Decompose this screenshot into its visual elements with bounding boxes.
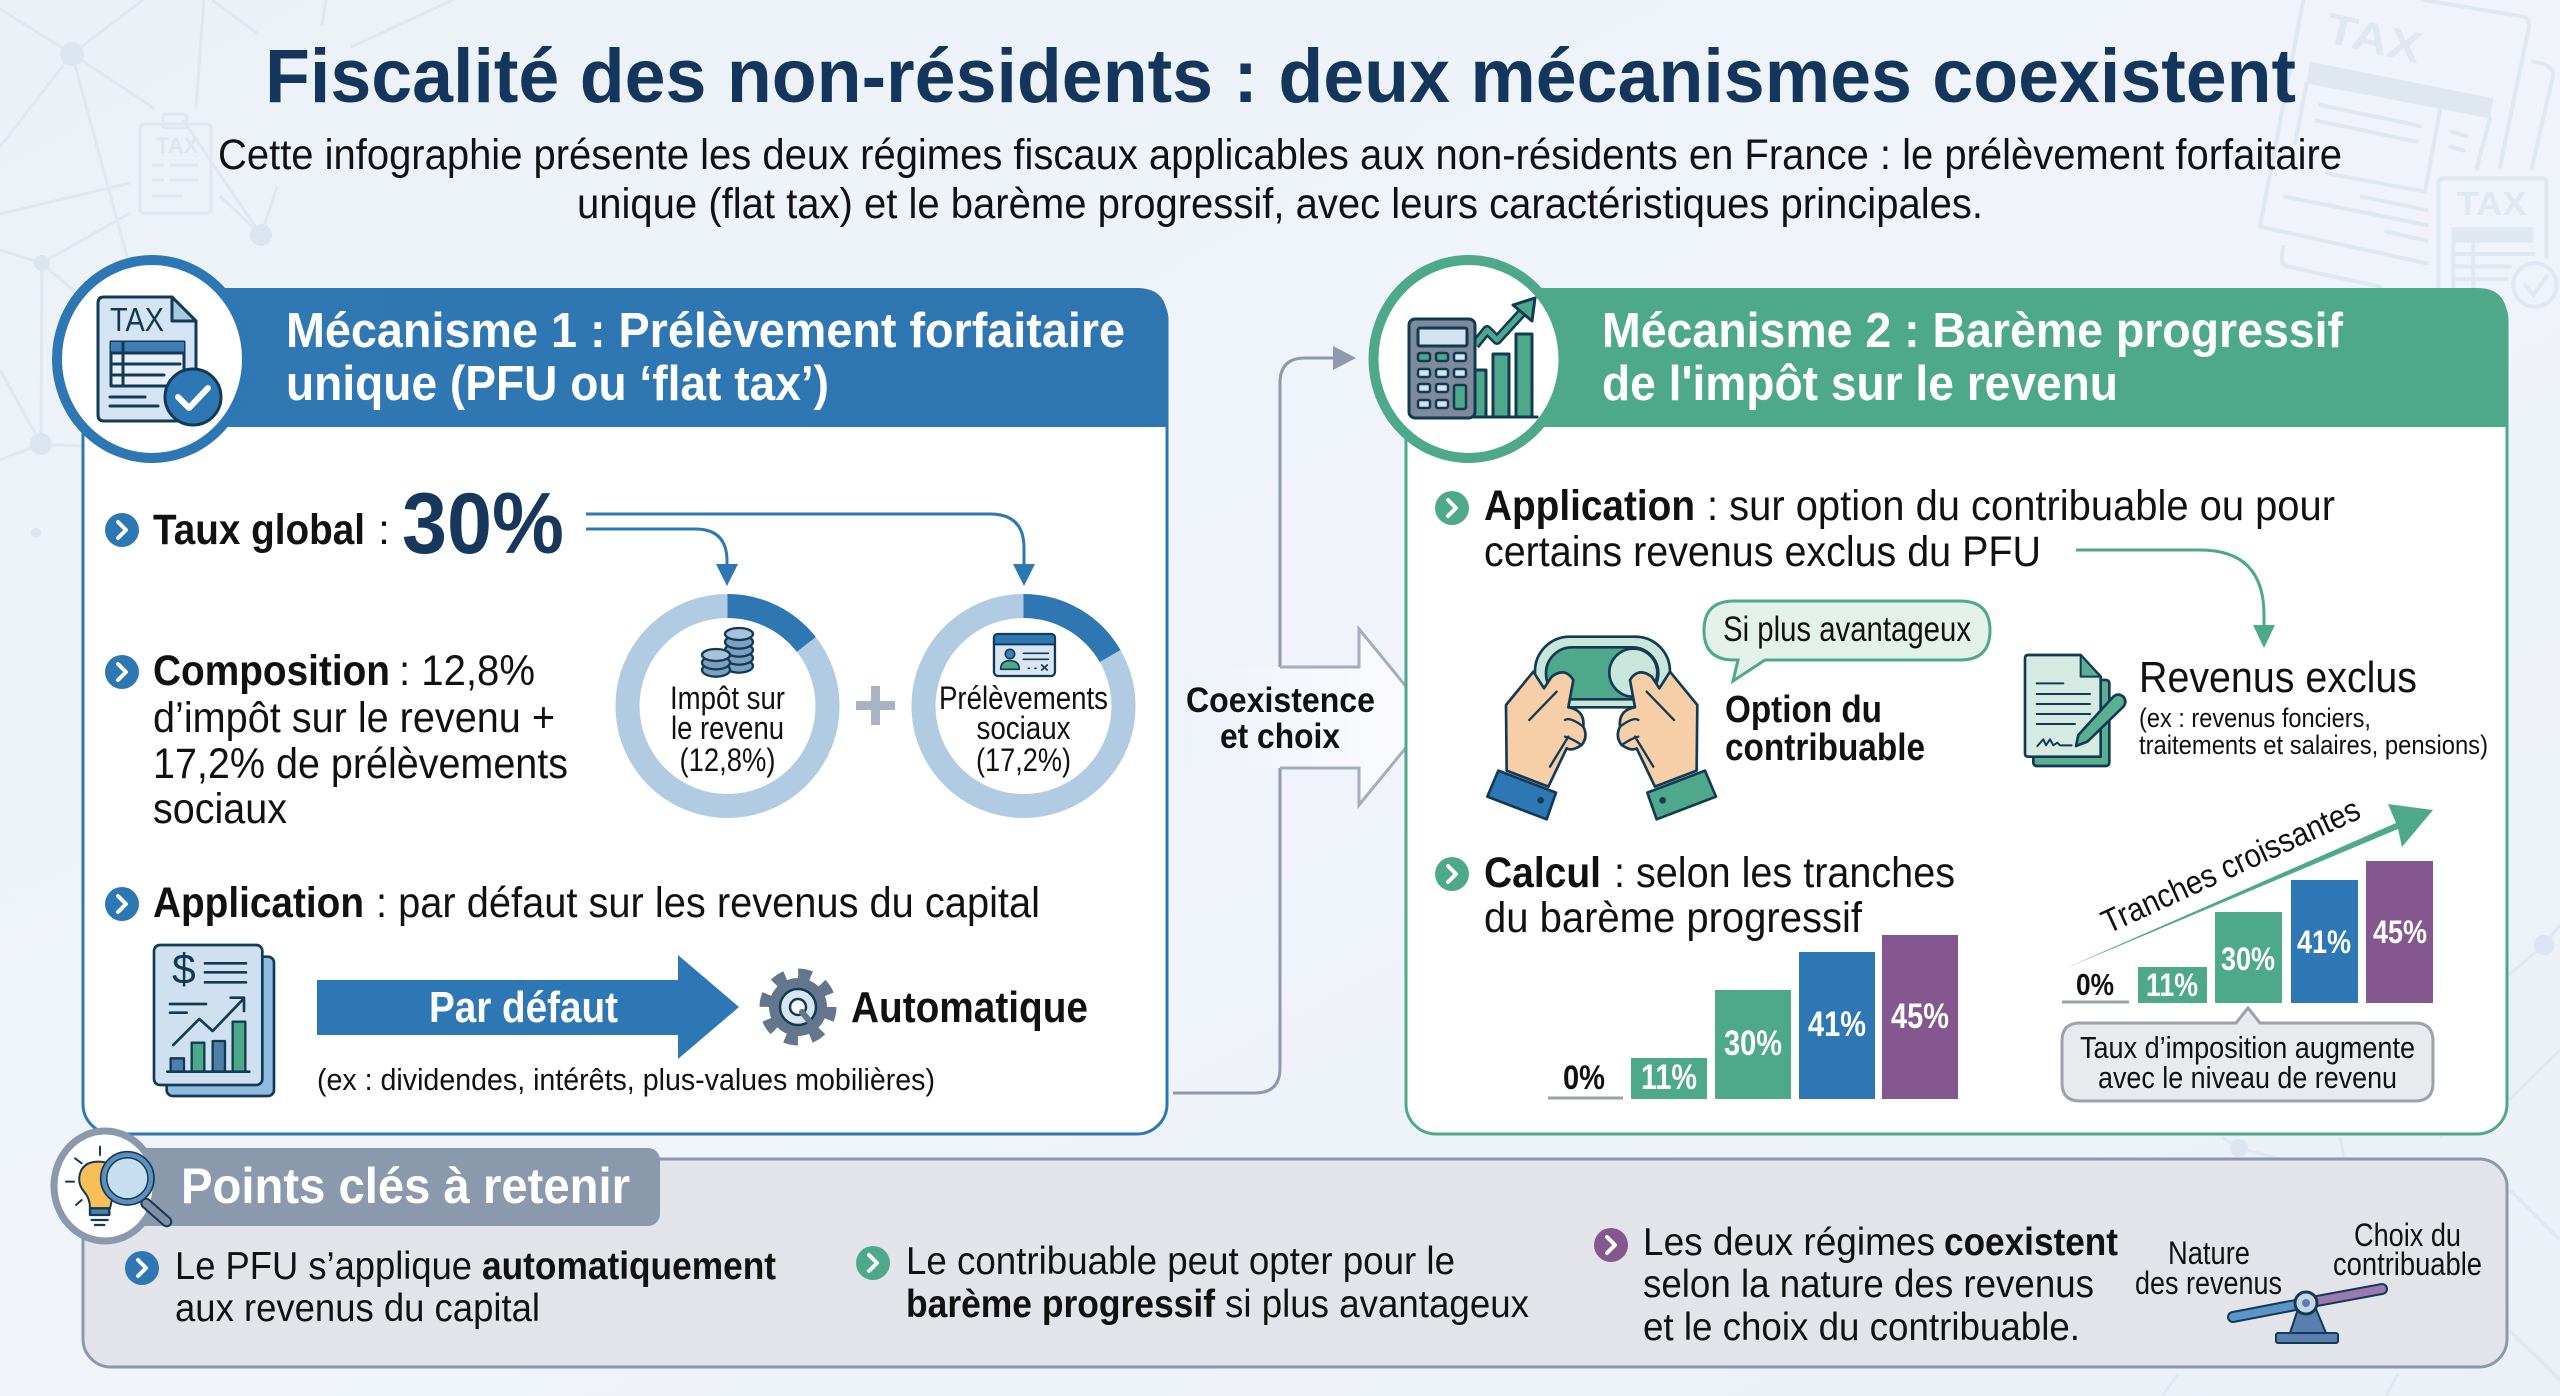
key point: barème: si plus avantageux [1225, 1283, 1529, 1326]
bullet: calcul: Calcul [1484, 849, 1601, 897]
bar chart: tax brackets: 30% [1724, 1024, 1782, 1063]
key point: barème: Le contribuable peut opter pour le [906, 1240, 1455, 1283]
icon: balance scale: contribuable [2333, 1246, 2482, 1282]
donut: impôt sur le revenu: le revenu [671, 710, 784, 746]
icon: gear [765, 974, 831, 1040]
bullet: calcul: : selon les tranches [1614, 849, 1955, 897]
label: revenus exclus: traitements et salaires, pensions) [2139, 730, 2488, 760]
background icon: tax documents: TAX [2457, 186, 2527, 223]
icon: bulb and magnifier [54, 1131, 167, 1241]
panel: mechanism 1 [57, 260, 1167, 1134]
arrow: tranches croissantes: Tranches croissantes [2096, 790, 2366, 940]
icon: hands holding toggle [1487, 637, 1716, 819]
arrow: par défaut [317, 955, 739, 1059]
key point: coexistence: Les deux régimes [1643, 1221, 1935, 1264]
connector: PFU to coexistence arrow and mechanism 2 [1173, 346, 1356, 1093]
donut: prélèvements sociaux: sociaux [976, 710, 1070, 746]
label: option du contribuable [1725, 689, 1925, 769]
heading pill: points clés à retenir: Points clés à retenir [181, 1158, 630, 1214]
bar chart: tax brackets: 41% [1808, 1005, 1866, 1044]
donut: prélèvements sociaux [924, 606, 1124, 806]
arrows from 30% to donuts [586, 514, 1035, 586]
panel: mechanism 2 [1374, 260, 2507, 1134]
bar chart: small tax brackets [2062, 861, 2433, 1003]
key point: coexistence: coexistent [1944, 1221, 2118, 1264]
bullet: composition: Composition [153, 647, 390, 695]
label: option du contribuable: contribuable [1725, 727, 1925, 769]
examples text: (ex : dividendes, intérêts, plus-values mobilières) [317, 1062, 935, 1097]
title: Fiscalité des non-résidents : deux mécanismes coexistent [265, 34, 2296, 119]
subtitle: Cette infographie présente les deux régimes fiscaux applicables aux non-résidents en France : le prélèvement forfaitaire [218, 131, 2342, 179]
bar chart: small tax brackets: 0% [2076, 967, 2114, 1002]
bar chart: tax brackets: 0% [1563, 1059, 1605, 1097]
bullet: calcul [1435, 849, 1955, 942]
arrow to revenus exclus [2076, 550, 2275, 648]
heading: mechanism 2: de l'impôt sur le revenu [1602, 357, 2118, 411]
subtitle: unique (flat tax) et le barème progressif, avec leurs caractéristiques principales. [577, 180, 1983, 228]
icon: balance scale: Choix du [2354, 1217, 2461, 1253]
bullet: application: Application [1484, 482, 1695, 530]
heading: mechanism 1: Mécanisme 1 : Prélèvement forfaitaire [286, 304, 1125, 358]
label: revenus exclus: (ex : revenus fonciers, [2139, 703, 2371, 733]
bullet: application par défaut: : par défaut sur les revenus du capital [376, 879, 1040, 927]
background icon: tax documents: TAX [2321, 5, 2426, 73]
callout: taux d'imposition: Taux d’imposition augmente [2080, 1030, 2415, 1065]
bullet: composition: : 12,8% [399, 647, 535, 695]
panel: points clés [54, 1131, 2507, 1367]
bar chart: small tax brackets: 45% [2373, 914, 2427, 950]
icon: balance scale: des revenus [2135, 1265, 2282, 1301]
bar chart: tax brackets: 45% [1891, 997, 1949, 1036]
key point: PFU: automatiquement [482, 1245, 776, 1288]
callout: taux d'imposition: avec le niveau de revenu [2098, 1060, 2397, 1095]
callout: taux d'imposition [2062, 1008, 2433, 1101]
bullet: application par défaut: Application [153, 879, 364, 927]
heading: mechanism 1: unique (PFU ou ‘flat tax’) [286, 357, 829, 411]
key point: coexistence [1594, 1221, 2118, 1349]
key point: barème: barème progressif [906, 1283, 1216, 1326]
icon: id card [994, 634, 1055, 676]
background icon: tax clipboard: TAX [156, 133, 199, 158]
arrow: par défaut: Par défaut [429, 983, 618, 1032]
bullet: application par défaut [105, 879, 1040, 927]
donut: impôt sur le revenu: (12,8%) [680, 742, 776, 778]
heading pill: points clés à retenir [120, 1148, 660, 1226]
icon: balance scale [2135, 1217, 2482, 1343]
key point: PFU [125, 1245, 776, 1330]
icon: coins [702, 628, 753, 677]
panel header: mechanism 2 [1406, 288, 2507, 427]
icon: revenue report: $ [172, 946, 196, 994]
bullet: taux global: Taux global [153, 506, 365, 554]
icon: tax document badge [57, 260, 247, 458]
bullet: application: certains revenus exclus du PFU [1484, 528, 2041, 576]
speech bubble: si plus avantageux: Si plus avantageux [1723, 610, 1971, 649]
label: revenus exclus [2139, 653, 2488, 760]
arrow: tranches croissantes [2064, 790, 2433, 969]
bullet: composition: 17,2% de prélèvements [153, 740, 568, 788]
label: automatique: Automatique [851, 983, 1088, 1032]
key point: barème [856, 1240, 1529, 1326]
donut: prélèvements sociaux: (17,2%) [976, 742, 1071, 778]
key point: coexistence: et le choix du contribuable. [1643, 1306, 2080, 1349]
bullet: application: : sur option du contribuable ou pour [1707, 482, 2335, 530]
icon: signed document [2025, 655, 2125, 766]
bar chart: small tax brackets: 30% [2221, 941, 2275, 977]
bar chart: small tax brackets: 11% [2146, 967, 2198, 1003]
bullet: composition: d’impôt sur le revenu + [153, 694, 555, 742]
bullet: calcul: du barème progressif [1484, 894, 1863, 942]
icon: calculator and growth chart [1374, 260, 1564, 458]
donut: prélèvements sociaux: Prélèvements [939, 680, 1108, 716]
key point: PFU: Le PFU s’applique [175, 1245, 472, 1288]
icon: tax document badge: TAX [110, 301, 164, 338]
key point: PFU: aux revenus du capital [175, 1287, 540, 1330]
label: option du contribuable: Option du [1725, 689, 1882, 731]
bar chart: tax brackets [1548, 935, 1958, 1099]
background icon: tax documents [2260, 0, 2557, 307]
key point: coexistence: selon la nature des revenus [1643, 1263, 2094, 1306]
panel header: mechanism 1 [83, 288, 1167, 427]
heading: mechanism 1 [286, 304, 1125, 411]
heading: mechanism 2: Mécanisme 2 : Barème progressif [1602, 304, 2344, 358]
background icon: tax clipboard [140, 114, 211, 213]
bullet: taux global: : [378, 506, 390, 554]
arrow: coexistence et choix: et choix [1220, 717, 1340, 756]
plus sign [856, 686, 895, 725]
arrow: coexistence et choix [1185, 629, 1431, 805]
bar chart: tax brackets: 11% [1641, 1058, 1697, 1097]
donut: impôt sur le revenu [628, 606, 828, 806]
subtitle [218, 131, 2342, 228]
label: revenus exclus: Revenus exclus [2139, 653, 2417, 702]
arrow: coexistence et choix: Coexistence [1186, 681, 1375, 720]
icon: balance scale: Nature [2168, 1235, 2250, 1271]
heading: mechanism 2 [1602, 304, 2344, 411]
donut: impôt sur le revenu: Impôt sur [670, 680, 785, 716]
bar chart: small tax brackets: 41% [2297, 924, 2351, 960]
icon: revenue report [154, 945, 274, 1096]
big number: 30%: 30% [402, 476, 564, 572]
bullet: composition [105, 647, 568, 833]
bullet: composition: sociaux [153, 785, 287, 833]
speech bubble: si plus avantageux [1704, 601, 1990, 681]
bullet: application [1435, 482, 2335, 576]
